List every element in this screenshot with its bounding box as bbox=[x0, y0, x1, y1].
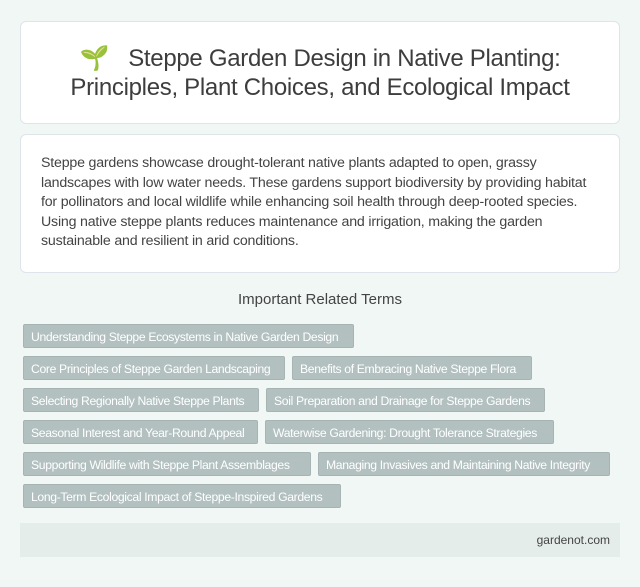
tag bbox=[266, 388, 545, 412]
tag bbox=[265, 420, 554, 444]
tag: Soil Preparation and Drainage for Steppe Gardens bbox=[274, 394, 530, 408]
tag bbox=[292, 356, 532, 380]
tag: Managing Invasives and Maintaining Native Integrity bbox=[326, 458, 590, 472]
tag: Supporting Wildlife with Steppe Plant Assemblages bbox=[31, 458, 290, 472]
footer text: gardenot.com bbox=[537, 533, 610, 547]
tag: Benefits of Embracing Native Steppe Flora bbox=[300, 362, 516, 376]
description text: Steppe gardens showcase drought-tolerant native plants adapted to open, grassy landscapes with low water needs. These gardens support biodiversity by providing habitat for pollinators and local wildlife while enhancing soil health through deep-rooted species. Using native steppe plants reduces maintenance and irrigation, making the garden sustainable and resilient in arid conditions. bbox=[41, 155, 586, 249]
heading: related terms: Important Related Terms bbox=[238, 291, 402, 308]
tag: Waterwise Gardening: Drought Tolerance Strategies bbox=[273, 426, 537, 440]
tag bbox=[23, 324, 354, 348]
tag bbox=[23, 388, 259, 412]
tag bbox=[23, 356, 285, 380]
tag: Understanding Steppe Ecosystems in Native Garden Design bbox=[31, 330, 338, 344]
title bbox=[70, 45, 570, 101]
tag bbox=[23, 484, 341, 508]
tag bbox=[23, 452, 311, 476]
description card bbox=[20, 134, 620, 273]
tag: Core Principles of Steppe Garden Landscaping bbox=[31, 362, 270, 376]
title: Principles, Plant Choices, and Ecological Impact bbox=[70, 74, 570, 101]
title: 🌱 Steppe Garden Design in Native Planting: bbox=[80, 45, 560, 72]
footer bbox=[20, 523, 620, 557]
tag: Seasonal Interest and Year-Round Appeal bbox=[31, 426, 244, 440]
tag: Selecting Regionally Native Steppe Plants bbox=[31, 394, 244, 408]
tag bbox=[23, 420, 258, 444]
header card bbox=[20, 21, 620, 124]
tags bbox=[23, 324, 610, 508]
tag bbox=[318, 452, 610, 476]
tag: Long-Term Ecological Impact of Steppe-Inspired Gardens bbox=[31, 490, 322, 504]
